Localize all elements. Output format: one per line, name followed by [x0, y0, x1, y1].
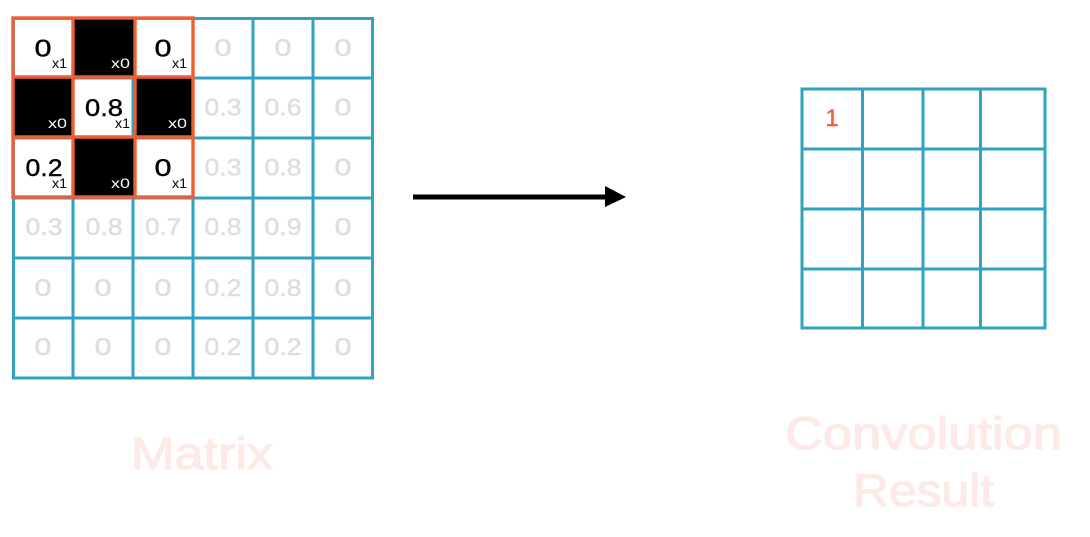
filter cell values: 0 — [154, 155, 172, 182]
faded cell values: 0.3 — [204, 154, 242, 182]
filter cell values — [26, 36, 187, 191]
faded cell values: 0.8 — [204, 214, 242, 241]
filter cell values: x1 — [52, 175, 67, 191]
faded cell values: 0 — [334, 94, 352, 122]
faded cell values: 0.2 — [204, 275, 242, 302]
faded cell values: 0.6 — [264, 94, 302, 122]
result value: 1 — [825, 105, 839, 132]
arrow — [413, 186, 626, 207]
faded cell values: 0 — [154, 275, 172, 302]
filter cell values: 0 — [154, 36, 172, 62]
matrix grid — [13, 18, 373, 378]
faded cell values: 0 — [334, 334, 352, 361]
faded cell values: 0 — [94, 275, 112, 302]
filter cell values: x0 — [111, 175, 130, 191]
filter cell values: x0 — [111, 55, 130, 71]
filter cell values: 0.8 — [85, 95, 123, 122]
filter cell values: 0 — [34, 36, 52, 62]
faded cell values: 0.7 — [145, 214, 181, 241]
label: convolution result: Convolution — [785, 408, 1062, 459]
label: convolution result — [785, 408, 1062, 516]
panel: convolution result grid — [802, 89, 1045, 328]
faded cell values: 0.8 — [264, 154, 302, 182]
faded cell values: 0 — [214, 35, 232, 62]
panel: input matrix — [13, 18, 373, 378]
filter cell values: x1 — [115, 115, 130, 131]
masked cells — [13, 18, 193, 197]
faded cell values: 0 — [154, 334, 172, 361]
filter cell values: 0.2 — [26, 155, 62, 182]
filter cell values: x1 — [172, 175, 187, 191]
faded cell values: 0 — [334, 35, 352, 62]
faded cell values: 0.3 — [204, 94, 242, 122]
result grid — [802, 89, 1045, 328]
faded cell values: 0.8 — [264, 275, 302, 302]
faded cell values: 0.3 — [26, 214, 62, 241]
filter cell values: x0 — [168, 115, 187, 131]
filter cell values: x1 — [52, 55, 67, 71]
faded cell values: 0.8 — [86, 214, 122, 241]
faded cell values: 0 — [34, 334, 52, 361]
filter cell values: x0 — [48, 115, 67, 131]
faded cell values: 0 — [334, 154, 352, 182]
label: matrix: Matrix — [131, 428, 274, 479]
faded cell values: 0 — [334, 214, 352, 241]
filter cell values: x1 — [172, 55, 187, 71]
faded cell values: 0 — [334, 275, 352, 302]
faded cell values: 0 — [274, 35, 292, 62]
faded cell values: 0.9 — [264, 214, 302, 241]
faded cell values: 0 — [34, 275, 52, 302]
faded cell values: 0.2 — [204, 334, 242, 361]
filter outline — [13, 18, 193, 197]
faded cell values — [26, 35, 352, 361]
faded cell values: 0.2 — [264, 334, 302, 361]
faded cell values: 0 — [94, 334, 112, 361]
label: convolution result: Result — [853, 465, 995, 516]
